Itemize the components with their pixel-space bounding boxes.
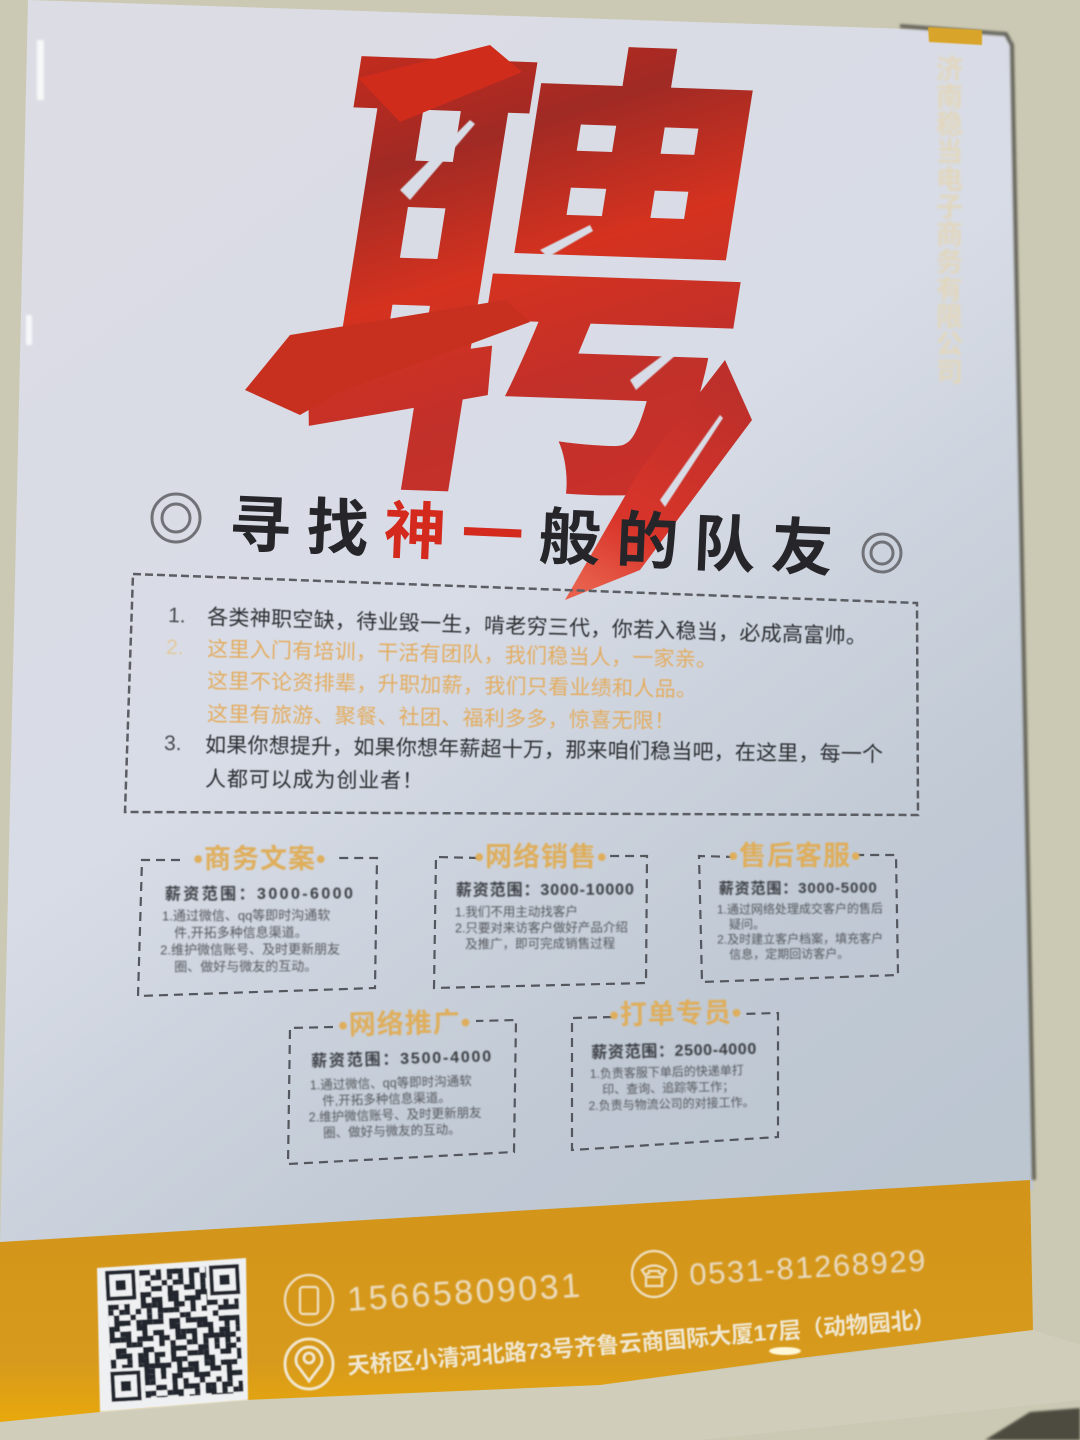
benefits text: 1.: [168, 604, 186, 628]
job title: •商务文案•: [194, 844, 326, 874]
frame shadow bottom right: [985, 1408, 1080, 1440]
salary and duties: [717, 879, 883, 962]
benefits text: 人都可以成为创业者！: [205, 768, 423, 793]
icon: telephone: [632, 1251, 676, 1297]
benefits text: 这里有旅游、聚餐、社团、福利多多，惊喜无限！: [207, 703, 675, 733]
glare highlights: [26, 40, 44, 345]
salary and duties: [587, 1040, 758, 1113]
heading: 寻找神一般的队友: [228, 490, 850, 585]
benefits text: 这里不论资排辈，升职加薪，我们只看业绩和人品。: [207, 670, 697, 702]
heading right ring ornament: [863, 534, 901, 572]
salary and duties: 疑问。: [729, 916, 765, 931]
salary and duties: 薪资范围：2500-4000: [591, 1040, 757, 1062]
job title: •网络推广•: [338, 1007, 472, 1041]
benefits text: 2.: [166, 636, 184, 659]
heading left ring ornament: [152, 494, 200, 542]
brush accent: right tail: [565, 360, 752, 600]
salary and duties: [455, 881, 634, 951]
job card: 网络推广: [288, 1007, 516, 1164]
salary and duties: 1.我们不用主动找客户: [455, 904, 578, 919]
salary and duties: 薪资范围：3000-5000: [719, 879, 877, 898]
salary and duties: 薪资范围：3000-10000: [456, 881, 634, 899]
brush accent: top sweep: [358, 45, 522, 122]
icon: mobile phone: [285, 1275, 333, 1325]
salary and duties: 2.负责与物流公司的对接工作。: [588, 1094, 755, 1113]
job card: 打单专员: [572, 998, 778, 1150]
salary and duties: 圈、做好与微友的互动。: [323, 1121, 461, 1140]
job title: •售后客服•: [729, 841, 861, 871]
salary and duties: 2.只要对来访客户做好产品介绍: [455, 920, 628, 935]
salary and duties: 件,开拓多种信息渠道。: [322, 1090, 451, 1108]
company name vertical text: 济南稳当电子商务有限公司: [932, 55, 962, 385]
brush accent: left sweep: [245, 300, 530, 415]
salary and duties: 1.通过微信、qq等即时沟通软: [310, 1073, 472, 1093]
phone number: 15665809031: [346, 1267, 584, 1319]
landline number: 0531-81268929: [688, 1243, 928, 1292]
salary and duties: 信息，定期回访客户。: [729, 946, 849, 961]
panel: benefits dashed box: [125, 574, 918, 815]
finder squares: [105, 1264, 247, 1403]
job title: •打单专员•: [609, 998, 743, 1030]
salary and duties: 2.维护微信账号、及时更新朋友: [160, 942, 340, 957]
yellow tab: [928, 27, 982, 45]
band glare: [769, 1347, 801, 1355]
salary and duties: 薪资范围：3500-4000: [311, 1047, 491, 1070]
benefits text: 如果你想提升，如果你想年薪超十万，那来咱们稳当吧，在这里，每一个: [205, 734, 883, 766]
big character: 聘: 聘: [268, 12, 794, 562]
job card: 商务文案: [138, 844, 377, 996]
address: 天桥区小清河北路73号齐鲁云商国际大厦17层（动物园北）: [346, 1307, 937, 1379]
poster top edge shadow: [900, 26, 1034, 1180]
salary and duties: 圈、做好与微友的互动。: [174, 959, 317, 974]
benefits text: [164, 604, 883, 793]
benefits text: 3.: [164, 732, 182, 755]
benefits text: 各类神职空缺，待业毁一生，啃老穷三代，你若入稳当，必成高富帅。: [207, 606, 867, 649]
salary and duties: 及推广，即可完成销售过程: [465, 936, 616, 951]
salary and duties: 1.负责客服下单后的快递单打: [590, 1062, 744, 1081]
salary and duties: 2.及时建立客户档案，填充客户: [717, 930, 883, 947]
salary and duties: 1.通过网络处理成交客户的售后: [717, 900, 883, 917]
frame lower light strip: [0, 1330, 1080, 1440]
salary and duties: [307, 1047, 493, 1141]
job card: 售后客服: [699, 841, 898, 982]
job card: 网络销售: [434, 842, 647, 988]
salary and duties: 件,开拓多种信息渠道。: [174, 925, 308, 940]
benefits text: 这里入门有培训，干活有团队，我们稳当人，一家亲。: [207, 638, 717, 672]
salary and duties: 印、查询、追踪等工作；: [602, 1078, 734, 1097]
job title: •网络销售•: [475, 842, 607, 872]
icon: location pin: [285, 1339, 333, 1389]
salary and duties: 1.通过微信、qq等即时沟通软: [162, 908, 330, 923]
salary and duties: 薪资范围：3000-6000: [165, 884, 353, 903]
brush texture streaks: [400, 120, 723, 507]
salary and duties: 2.维护微信账号、及时更新朋友: [309, 1105, 482, 1125]
QR code: [97, 1258, 248, 1412]
yellow contact band: [0, 1180, 1033, 1422]
salary and duties: [160, 884, 353, 974]
